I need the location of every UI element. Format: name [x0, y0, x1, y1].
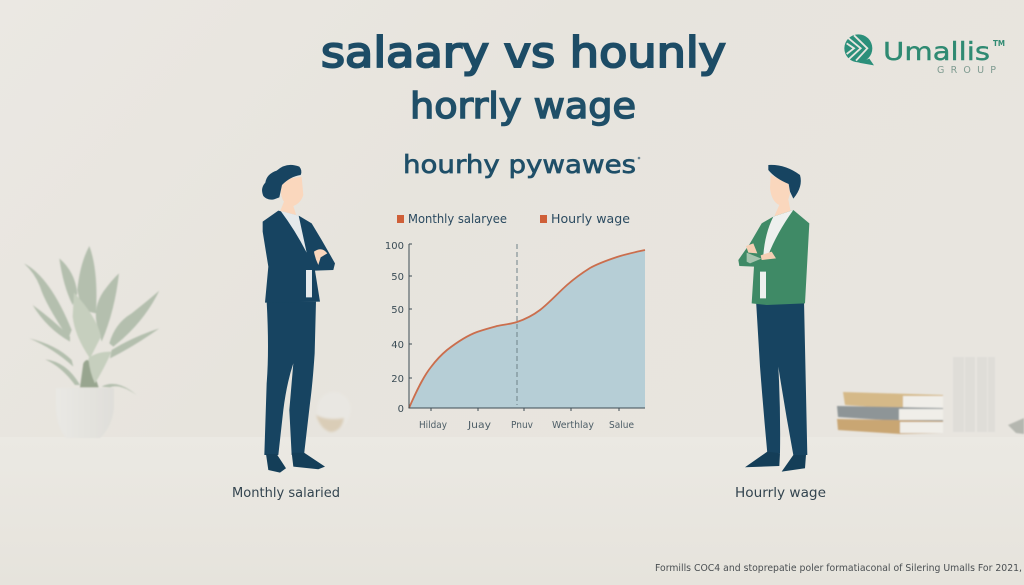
- y-axis labels: 40: [391, 340, 404, 351]
- y-axis labels: 0: [398, 404, 404, 415]
- chart: [385, 212, 645, 431]
- axes: [409, 244, 645, 411]
- bottom book: [837, 419, 943, 434]
- curve line: [409, 250, 645, 408]
- top book: [843, 392, 943, 409]
- upper body: [738, 165, 809, 305]
- hands: [746, 243, 776, 260]
- figure: salaried woman: [262, 165, 335, 473]
- cuff: [747, 253, 761, 263]
- hair: [768, 165, 801, 199]
- x-axis labels: [419, 420, 634, 431]
- label: hourly wage: Hourrly wage: [735, 485, 826, 501]
- x-axis labels: Hilday: [419, 420, 447, 431]
- trousers and shoes: [745, 300, 807, 472]
- figure: hourly man: [738, 165, 809, 472]
- neck and face: [770, 175, 791, 218]
- y-axis labels: 50: [391, 272, 404, 283]
- y-axis labels: [385, 241, 404, 415]
- stem: [80, 360, 99, 387]
- legend: monthly salaryee: Monthly salaryee: [408, 212, 507, 226]
- label: monthly salaried: Monthly salaried: [232, 485, 340, 501]
- subtitle: horrly wage: [410, 86, 636, 127]
- dashed marker line: [516, 244, 518, 405]
- right edge object: [1008, 418, 1024, 434]
- neck and face: [280, 177, 303, 217]
- hair and bun: [262, 165, 301, 200]
- hands: [314, 249, 327, 265]
- shirt: [281, 211, 312, 297]
- middle book: [837, 406, 943, 421]
- pot: [56, 388, 114, 438]
- trousers and shoes: [264, 302, 325, 473]
- logo icon: [844, 34, 874, 65]
- back leaves: [24, 246, 159, 395]
- logo group text: GROUP: [937, 65, 996, 76]
- jacket: [263, 211, 335, 303]
- chart heading: hourhy pywawes: [403, 150, 636, 179]
- jacket: [738, 210, 809, 305]
- logo wordmark: Umallis: [883, 37, 990, 66]
- logo: [844, 34, 1005, 76]
- plant in pot: [24, 246, 159, 438]
- trademark: TM: [993, 39, 1005, 48]
- title: salaary vs hounly: [321, 28, 726, 77]
- legend: hourly wage: Hourly wage: [551, 212, 630, 226]
- upper body: [262, 165, 335, 303]
- front leaves: [73, 293, 112, 383]
- x-axis labels: Juay: [467, 420, 491, 431]
- y-axis labels: 50: [391, 305, 404, 316]
- white upright boxes: [953, 357, 995, 432]
- books and white boxes: [837, 357, 1024, 434]
- shirt: [760, 210, 793, 298]
- x-axis labels: Pnuv: [511, 420, 533, 431]
- x-axis labels: Werthlay: [552, 420, 594, 431]
- area under curve: [409, 250, 645, 408]
- y-axis labels: 20: [391, 374, 404, 385]
- small glass ornament: [316, 392, 351, 432]
- y-axis labels: 100: [385, 241, 404, 252]
- x-axis labels: Salue: [609, 420, 634, 431]
